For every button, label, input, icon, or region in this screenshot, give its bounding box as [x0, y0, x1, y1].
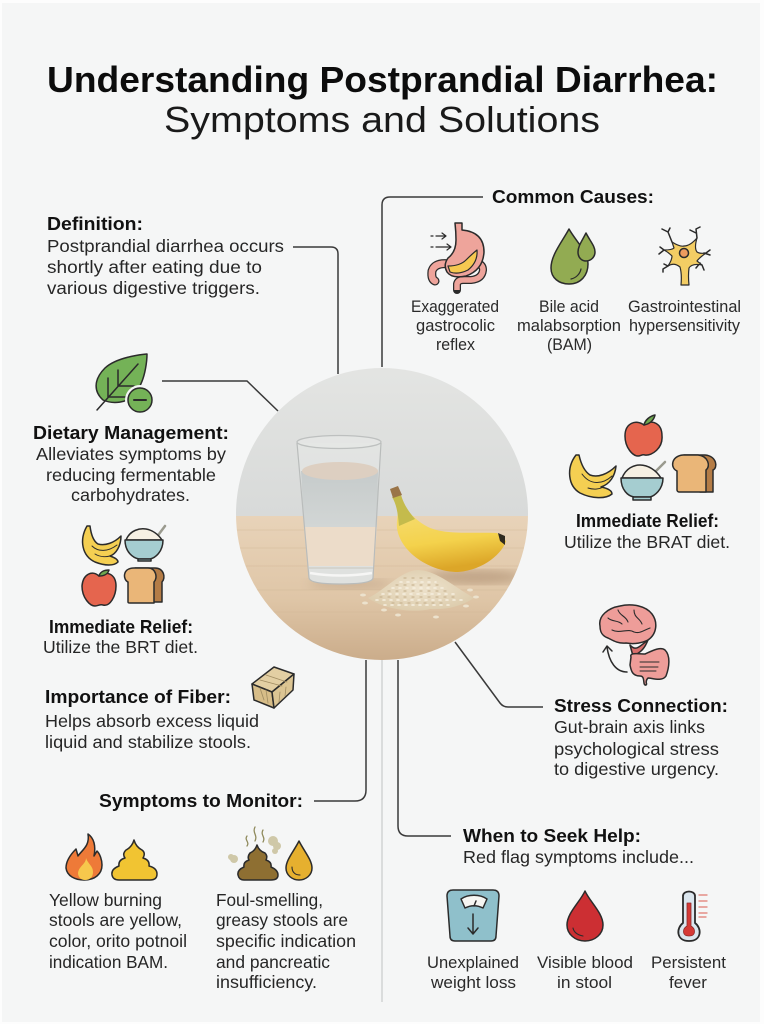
left immediate relief text: Immediate Relief:	[49, 616, 193, 637]
icon: yellow stool	[112, 840, 157, 880]
icon: neuron	[659, 227, 710, 285]
labels: red flag symptoms: weight loss	[430, 974, 516, 992]
symptom text: yellow stools	[49, 890, 187, 972]
icon: brain and gut	[600, 605, 669, 685]
label: exaggerated gastrocolic reflex	[411, 298, 499, 354]
stress connection text	[554, 695, 728, 779]
label: bile acid malabsorption: (BAM)	[547, 336, 592, 354]
labels: red flag symptoms: in stool	[557, 974, 612, 992]
connector: dietary management	[162, 381, 278, 411]
symptom text: yellow stools: color, orito potnoil	[49, 931, 187, 951]
heading: common causes: Common Causes:	[492, 186, 654, 207]
definition text: Postprandial diarrhea occurs	[47, 236, 284, 256]
connector: stress connection	[455, 642, 543, 707]
icon: bread	[124, 568, 164, 603]
right immediate relief text: Immediate Relief:	[576, 510, 719, 531]
stress connection text: Gut-brain axis links	[554, 717, 705, 737]
label: gastrointestinal hypersensitivity	[628, 298, 741, 335]
connector: symptoms to monitor	[314, 660, 366, 801]
fiber text: liquid and stabilize stools.	[45, 732, 251, 752]
icon: apple	[625, 415, 662, 456]
dietary management text: Dietary Management:	[33, 422, 229, 443]
title: Symptoms and Solutions	[164, 99, 600, 140]
labels: red flag symptoms: Persistent	[651, 954, 726, 972]
connector: definition	[293, 247, 338, 374]
symptom text: yellow stools: Yellow burning	[49, 890, 162, 910]
symptom text: foul-smelling stools: Foul-smelling,	[216, 890, 323, 910]
labels: red flag symptoms: Unexplained	[427, 954, 519, 972]
definition text: shortly after eating due to	[47, 257, 262, 277]
symptom text: yellow stools: stools are yellow,	[49, 910, 182, 930]
fiber text	[45, 686, 259, 752]
central photo: water, banana and rice	[236, 368, 528, 660]
symptom text: foul-smelling stools: insufficiency.	[216, 972, 317, 992]
title	[47, 59, 718, 140]
icon: rice bowl	[125, 526, 165, 561]
right immediate relief text	[564, 510, 730, 552]
stress connection text: psychological stress	[554, 739, 719, 759]
left immediate relief text	[43, 616, 198, 657]
dietary management text: Alleviates symptoms by	[36, 444, 226, 464]
icon: foul-smelling stool	[228, 827, 281, 880]
label: bile acid malabsorption	[517, 298, 621, 354]
connector: common causes	[382, 197, 483, 367]
definition text	[47, 213, 284, 298]
fiber text: Importance of Fiber:	[45, 686, 231, 707]
icon: left BRAT foods	[82, 526, 165, 606]
definition text: Definition:	[47, 213, 143, 234]
right immediate relief text: Utilize the BRAT diet.	[564, 532, 730, 552]
icon: banana	[570, 455, 616, 498]
symptom text: foul-smelling stools	[216, 890, 356, 992]
label: exaggerated gastrocolic reflex: reflex	[436, 336, 476, 354]
icon: right BRAT foods	[570, 415, 716, 500]
when to seek help text: When to Seek Help:	[463, 825, 641, 846]
fiber text: Helps absorb excess liquid	[45, 711, 259, 731]
when to seek help text	[463, 825, 694, 867]
icon: weighing scale	[447, 890, 499, 941]
label: exaggerated gastrocolic reflex: Exaggerated	[411, 298, 499, 316]
symptom text: foul-smelling stools: and pancreatic	[216, 952, 330, 972]
dietary management text	[33, 422, 229, 505]
icon: thermometer	[678, 892, 707, 941]
stress connection text: Stress Connection:	[554, 695, 728, 716]
label: exaggerated gastrocolic reflex: gastrocolic	[416, 317, 495, 335]
icon: oil drop	[286, 841, 312, 880]
banana	[390, 486, 506, 572]
icon: rice bowl	[621, 462, 665, 500]
icon: bile drops	[551, 229, 595, 284]
icon: bread	[673, 455, 716, 492]
dietary management text: carbohydrates.	[71, 485, 190, 505]
label: bile acid malabsorption: malabsorption	[517, 317, 621, 335]
labels: red flag symptoms: fever	[669, 974, 708, 992]
label: gastrointestinal hypersensitivity: hypersensitivity	[629, 317, 741, 335]
labels: red flag symptoms	[427, 954, 726, 992]
icon: banana	[83, 526, 121, 565]
title: Understanding Postprandial Diarrhea:	[47, 59, 718, 100]
icon: leaf with minus badge	[96, 354, 155, 415]
dietary management text: reducing fermentable	[46, 465, 216, 485]
stress connection text: to digestive urgency.	[554, 759, 719, 779]
when to seek help text: Red flag symptoms include...	[463, 847, 694, 867]
connector: when to seek help	[398, 660, 451, 836]
heading: symptoms to monitor: Symptoms to Monitor:	[99, 790, 303, 811]
symptom text: foul-smelling stools: specific indication	[216, 931, 356, 951]
icon: stomach with reflex arrows	[431, 223, 484, 290]
left immediate relief text: Utilize the BRT diet.	[43, 637, 198, 657]
symptom text: yellow stools: indication BAM.	[49, 952, 168, 972]
icon: flame	[66, 834, 102, 880]
icon: blood drop	[567, 891, 603, 941]
label: gastrointestinal hypersensitivity: Gastrointestinal	[628, 298, 741, 316]
icon: apple	[82, 570, 116, 606]
labels: red flag symptoms: Visible blood	[537, 954, 633, 972]
icon: fiber block	[252, 667, 294, 708]
label: bile acid malabsorption: Bile acid	[539, 298, 599, 316]
glass of water	[297, 436, 381, 584]
rice pile	[360, 570, 479, 618]
symptom text: foul-smelling stools: greasy stools are	[216, 910, 348, 930]
definition text: various digestive triggers.	[47, 278, 260, 298]
